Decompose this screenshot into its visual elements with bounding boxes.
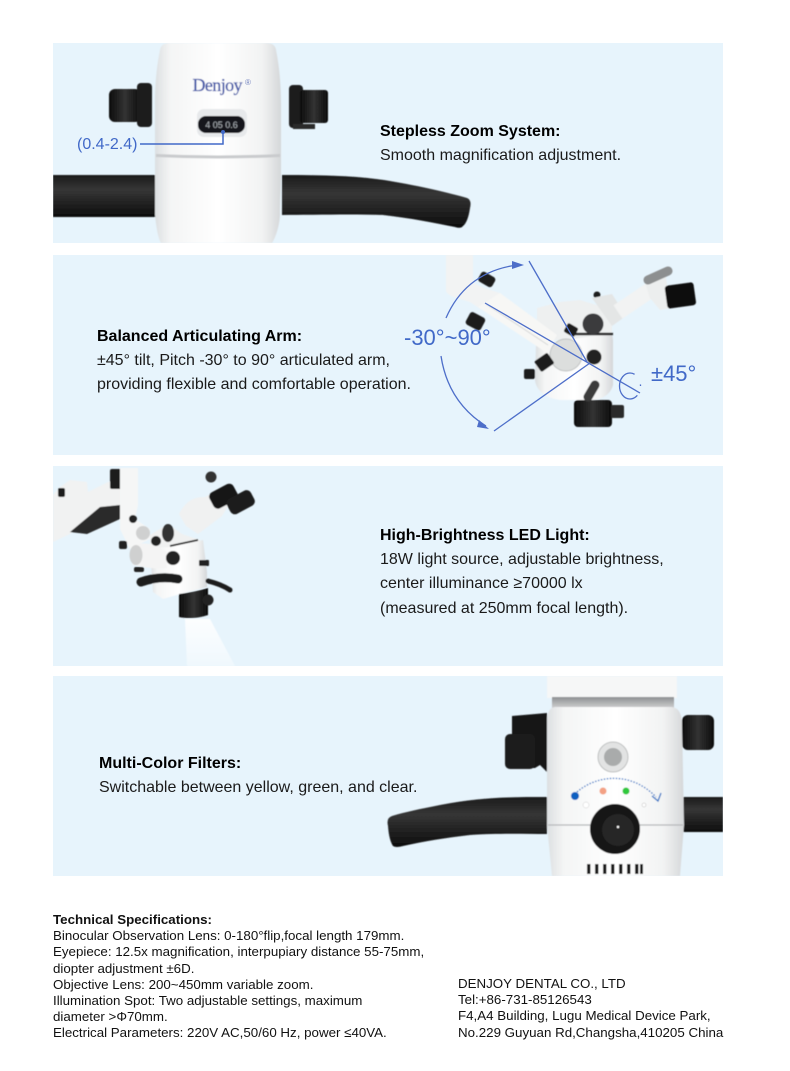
side housing — [136, 544, 154, 568]
text block: technical specifications: Electrical Parameters: 220V AC,50/60 Hz, power ≤40VA. — [53, 1025, 387, 1040]
scope body — [535, 333, 613, 400]
selector knob — [590, 804, 640, 854]
right knob — [682, 715, 714, 750]
text block: LED light: center illuminance ≥70000 lx — [380, 575, 583, 592]
logo: Denjoy — [192, 75, 242, 95]
illustration: articulating arm microscope — [446, 255, 696, 427]
text block: technical specifications — [53, 912, 424, 1040]
callout: zoom range: (0.4-2.4) — [77, 136, 137, 153]
binocular head — [179, 472, 257, 534]
text block: company contact: Tel:+86-731-85126543 — [458, 992, 592, 1007]
text block: LED light: (measured at 250mm focal length). — [380, 600, 628, 617]
panel: articulating arm — [53, 255, 723, 455]
text block: technical specifications: Technical Specifications: — [53, 912, 212, 927]
panel: stepless zoom — [53, 43, 723, 243]
scope body — [547, 707, 684, 876]
text block: company contact: F4,A4 Building, Lugu Medical Device Park, — [458, 1008, 711, 1023]
annotation: tilt lines and arcs — [441, 261, 640, 431]
text block: stepless zoom — [380, 123, 621, 164]
filter dots — [571, 788, 646, 808]
right handle — [680, 797, 723, 832]
text block: LED light: High-Brightness LED Light: — [380, 527, 590, 544]
column and elbow — [446, 256, 498, 306]
text block: stepless zoom: Smooth magnification adjustment. — [380, 147, 621, 164]
dotted arc arrow — [577, 778, 661, 801]
text block: LED light — [380, 527, 664, 617]
side knobs — [524, 323, 579, 379]
body knobs — [582, 314, 604, 397]
magnification window: 4 05 0.6 — [205, 120, 238, 130]
illustration: LED light microscope — [53, 468, 257, 666]
left knob — [109, 83, 152, 127]
text block: technical specifications: diopter adjustment ±6D. — [53, 961, 194, 976]
text block: stepless zoom: Stepless Zoom System: — [380, 123, 560, 140]
rear arm — [53, 480, 120, 542]
upper housing — [150, 526, 198, 547]
text block: technical specifications: diameter >Φ70mm. — [53, 1009, 168, 1024]
text block: articulating arm — [97, 328, 411, 393]
illustration: zoom system microscope body — [53, 43, 471, 243]
objective — [179, 588, 214, 618]
connector — [598, 742, 628, 772]
text block: company contact — [458, 976, 724, 1040]
illustrations layer — [53, 43, 723, 876]
text block: colour filters: Switchable between yellow, green, and clear. — [99, 779, 417, 796]
scope body — [150, 540, 207, 599]
eyepiece tube — [592, 271, 696, 326]
text block: technical specifications: Illumination Spot: Two adjustable settings, maximum — [53, 993, 362, 1008]
rotary plate — [550, 339, 582, 371]
elbow disc and knobs — [119, 515, 150, 549]
body knobs — [134, 524, 209, 572]
text block: colour filters — [99, 755, 417, 796]
upper housing — [537, 300, 612, 340]
left handle — [388, 797, 547, 847]
callout: zoom range — [77, 130, 225, 153]
column — [547, 676, 677, 698]
text block: articulating arm: ±45° tilt, Pitch -30° to 90° articulated arm, — [97, 352, 390, 369]
text block: technical specifications: Binocular Observation Lens: 0-180°flip,focal length 179mm. — [53, 928, 404, 943]
text block: colour filters: Multi-Color Filters: — [99, 755, 241, 772]
text block: company contact: DENJOY DENTAL CO., LTD — [458, 976, 626, 991]
panel: colour filters — [53, 676, 723, 876]
arm knobs — [465, 271, 600, 331]
objective — [574, 400, 624, 427]
left knobs — [505, 713, 547, 772]
text block: technical specifications: Eyepiece: 12.5x magnification, interpupiary distance 55-75mm, — [53, 944, 424, 959]
column — [120, 468, 150, 549]
right handle — [282, 175, 471, 228]
arm — [482, 294, 556, 348]
text block: company contact: No.229 Guyuan Rd,Changsha,410205 China — [458, 1025, 723, 1040]
illustration: filter wheel microscope — [388, 676, 723, 876]
light beam — [185, 619, 235, 666]
text block: articulating arm: providing flexible and comfortable operation. — [97, 376, 411, 393]
magnification window — [197, 109, 247, 137]
left handle — [53, 175, 158, 217]
text block: articulating arm: Balanced Articulating Arm: — [97, 328, 302, 345]
text block: LED light: 18W light source, adjustable brightness, — [380, 551, 664, 568]
panel: LED light — [53, 466, 723, 666]
label: tilt angle: ±45° — [651, 361, 696, 386]
scope body — [155, 43, 281, 243]
logo mark: ® — [245, 78, 251, 87]
handles — [141, 578, 230, 590]
vents — [587, 864, 643, 874]
text block: technical specifications: Objective Lens: 200~450mm variable zoom. — [53, 977, 313, 992]
right knob — [289, 85, 328, 129]
label: pitch angle: -30°~90° — [404, 325, 491, 350]
